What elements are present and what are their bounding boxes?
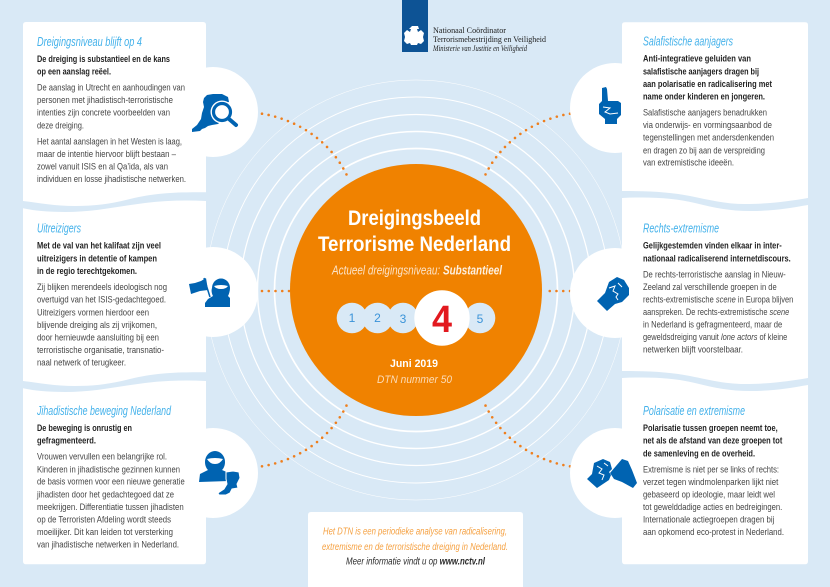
body text: Uitreizigers vormen hierdoor een [37,307,149,317]
panel: Jihadistische beweging [23,381,258,564]
central orange circle [290,164,542,416]
body text: en dragen zo bij aan de verspreiding [643,145,765,155]
heading: Uitreizigers [37,222,81,236]
heading: Rechts-extremisme [643,221,719,235]
body text [36,452,185,549]
lead text: salafistische aanjagers dragen bij [643,66,759,76]
lead text: op een aanslag reëel. [37,67,111,77]
description text [322,527,508,553]
body text: intenties zijn concrete voorbeelden van [37,108,170,118]
body text: zowel vanuit ISIS en al Qa’ida, als van [37,162,168,172]
body text [37,83,186,184]
body text: Het aantal aanslagen in het Westen is laag, [37,136,182,146]
body text: de basis vormen voor een nieuwe generatie [37,477,185,487]
lead text [643,423,782,458]
threat level scale: 2 [374,311,381,325]
body text [643,269,793,355]
panel: Polarisatie en extremisme [570,377,808,564]
threat level scale [337,290,495,346]
threat level scale: 1 [349,311,356,325]
issue number: DTN nummer 50 [377,374,453,386]
organisation name: Terrorismebestrijding en Veiligheid [433,35,547,44]
organisation name [432,26,547,53]
lead text: nationaal radicaliserend internetdiscours. [643,253,791,263]
lead text [37,423,132,446]
icon: flag and masked figure [189,278,230,307]
lead text: gefragmenteerd. [37,436,96,446]
icon: crest [404,26,424,45]
threat level scale: 4 [432,299,452,341]
lead text: Gelijkgestemden vinden elkaar in inter- [643,241,782,251]
body text: Kinderen in jihadistische gezinnen kunnen [37,464,180,474]
body text: naal netwerk of terugkeer. [37,358,126,368]
body text [643,107,774,168]
heading: Salafistische aanjagers [643,35,733,49]
central title [318,207,511,256]
lead text: net als de afstand van deze groepen tot [643,436,782,446]
body text: maar de intentie hiervoor blijft bestaan – [37,149,176,159]
logo: Rijksoverheid [402,0,547,53]
organisation name: Ministerie van Justitie en Veiligheid [432,44,528,53]
lead text: in de regio terechtgekomen. [37,266,137,276]
body text: personen met jihadistisch-terroristische [37,95,173,105]
panel: about the DTN [308,512,523,587]
more information link: Meer informatie vindt u op www.nctv.nl [346,557,485,568]
heading: Dreigingsniveau blijft op 4 [37,35,142,49]
concentric threat rings [206,80,626,500]
central title: Terrorisme Nederland [318,233,511,256]
body text: aan opkomend eco-protest in Nederland. [643,527,784,537]
lead text: uitreizigers in detentie of kampen [37,253,157,263]
body text: blijvende dreiging als zij vrijkomen, [37,320,157,330]
body text: netwerken blijft voorstelbaar. [643,345,743,355]
description text: Het DTN is een periodieke analyse van radicalisering, [323,527,507,538]
icon: map with magnifier [192,94,236,132]
body text: via onderwijs- en vormingsaanbod de [643,120,772,130]
body text: jihadisten door het gedachtegoed dat ze [36,489,174,499]
lead text: Polarisatie tussen groepen neemt toe, [643,423,778,433]
body text: van extremistische ideeën. [643,158,734,168]
body text: Salafistische aanjagers benadrukken [643,107,767,117]
icon: raised finger [599,87,621,124]
lead text [643,54,772,102]
body text: Zij blijken merendeels ideologisch nog [37,282,167,292]
lead text: aan polarisatie en radicalisering met [643,79,772,89]
current threat level line: Actueel dreigingsniveau: Substantieel [331,264,502,278]
lead text: De dreiging is substantieel en de kans [37,54,170,64]
date: Juni 2019 [390,358,438,370]
body text: terroristische organisatie, transnatio- [37,345,164,355]
body text: overtuigd van het ISIS-gedachtegoed. [37,295,166,305]
body text: tot gewelddadige acties en bedreigingen. [643,502,782,512]
body text: op de Terroristen Afdeling wordt steeds [37,514,171,524]
body text: door hernieuwde aansluiting bij een [37,332,159,342]
icon: two fists [587,459,637,488]
central title: Dreigingsbeeld [348,207,481,230]
panel: Dreigingsniveau [23,22,258,206]
body text [37,282,167,368]
heading: Polarisatie en extremisme [643,404,745,418]
body text: aanspreken. De rechts-extremistische scene [643,307,789,317]
body text: verzet tegen windmolenparken lijkt niet [643,477,779,487]
body text [643,464,784,537]
body text: in Nederland is gefragmenteerd, maar de [643,319,782,329]
lead text: Anti-integratieve geluiden van [643,54,751,64]
body text: De aanslag in Utrecht en aanhoudingen van [37,83,185,93]
icon: masked figure and map [199,451,240,495]
panel: Rechts-extremisme [570,197,808,384]
lead text: De beweging is onrustig en [37,423,132,433]
body text: Vrouwen vervullen een belangrijke rol. [37,452,167,462]
body text: meekrijgen. Differentiatie tussen jihadisten [37,502,184,512]
body text: individuen en losse jihadistische netwerken. [37,174,186,184]
icon: clenched fist [597,277,629,311]
body text: gebaseerd op ideologie, maar leidt wel [643,489,775,499]
body text: van jihadistische netwerken in Nederland. [37,539,179,549]
body text: tegenstellingen met andersdenkenden [643,133,774,143]
body text: moeilijker. Dit kan leiden tot versterking [37,527,173,537]
body text: Internationale actiegroepen dragen bij [643,514,774,524]
heading: Jihadistische beweging Nederland [36,404,172,418]
body text: rechts-extremistische scene in Europa blijven [643,294,793,304]
description text: extremisme en de terroristische dreiging in Nederland. [322,542,508,553]
threat level scale: 5 [477,312,484,326]
body text: deze dreiging. [37,120,84,130]
organisation name: Nationaal Coördinator [433,26,506,35]
body text: De rechts-terroristische aanslag in Nieuw- [643,269,786,279]
lead text: Met de val van het kalifaat zijn veel [37,241,161,251]
dotted connectors [262,114,570,466]
lead text [37,54,170,77]
body text: Zeeland zal verschillende groepen in de [643,282,777,292]
panel: Uitreizigers [23,201,258,386]
lead text: name onder kinderen en jongeren. [643,92,765,102]
lead text [37,241,161,276]
threat level scale: 3 [400,312,407,326]
panel: Salafistische aanjagers [570,22,808,204]
lead text [643,241,791,263]
lead text: de samenleving en de overheid. [643,448,755,458]
body text: geweldsdreiging vanuit lone actors of kleine [643,332,787,342]
body text: Extremisme is niet per se links of rechts: [643,464,779,474]
